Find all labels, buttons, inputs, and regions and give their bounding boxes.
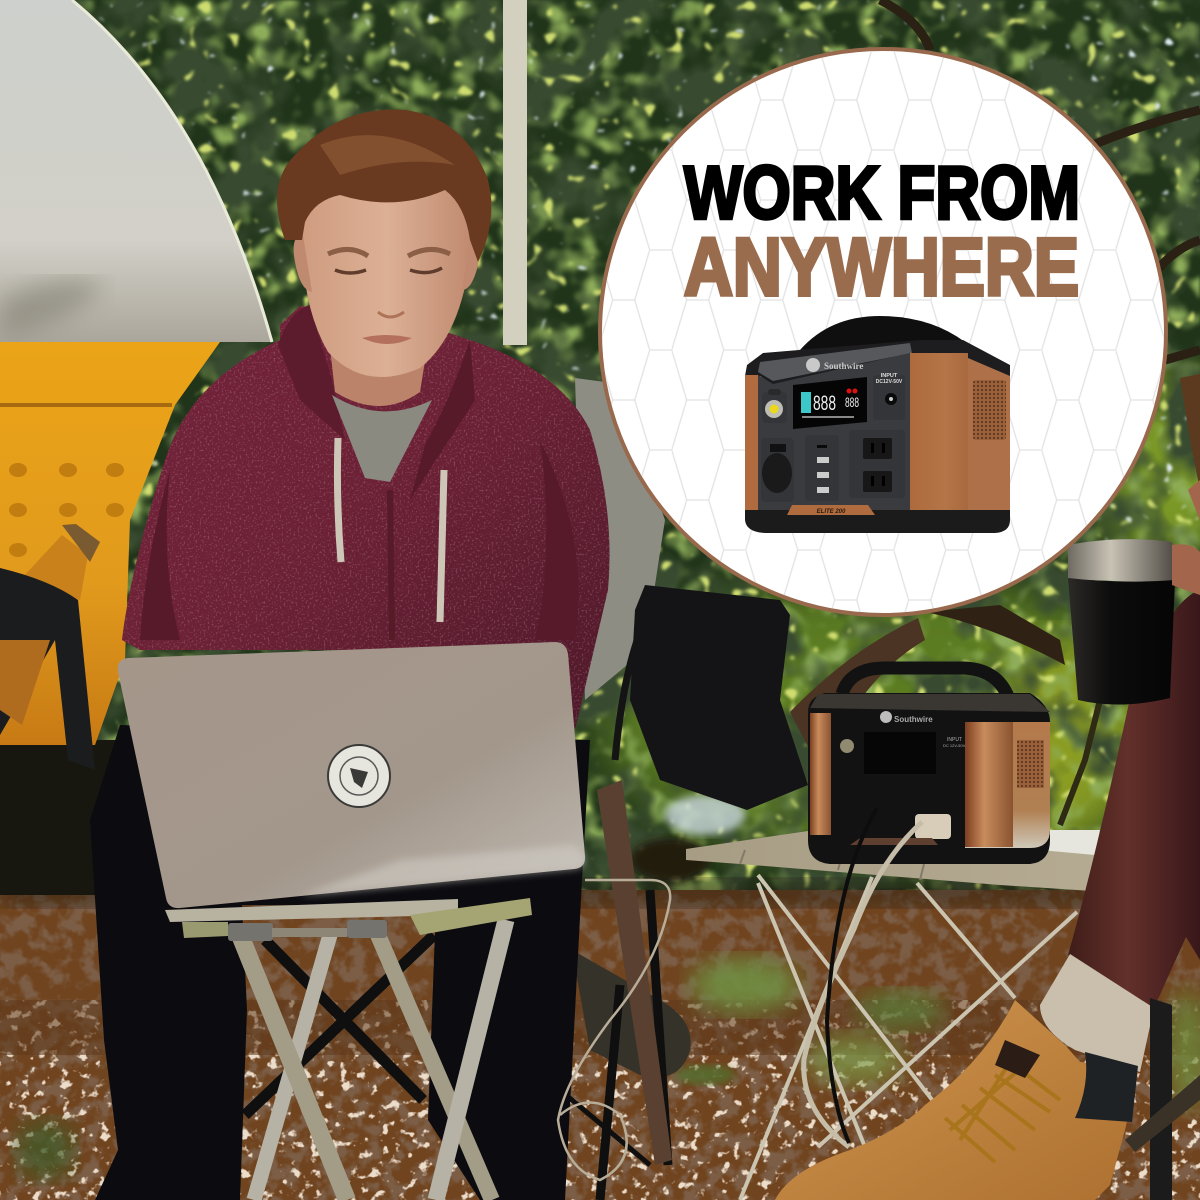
input port: DC12V-50V bbox=[876, 379, 903, 385]
input port: INPUT bbox=[881, 373, 898, 379]
portable power station on table bbox=[808, 668, 1050, 864]
vehicle: teardrop trailer bbox=[0, 0, 272, 895]
bottle and mesh pocket bbox=[0, 524, 100, 770]
drawstrings bbox=[337, 438, 444, 622]
LED lamp bbox=[762, 389, 787, 423]
grey control face bbox=[745, 353, 910, 512]
laptop bbox=[118, 642, 585, 908]
side table bbox=[686, 830, 1100, 1200]
logo: Southwire bbox=[824, 361, 863, 371]
base and model plate bbox=[745, 505, 1010, 533]
laptop sticker bbox=[328, 745, 390, 807]
product top band bbox=[758, 343, 912, 381]
hair bbox=[277, 110, 491, 262]
laptop stand bbox=[165, 898, 532, 1200]
product handle bbox=[800, 316, 965, 350]
water glimpse bbox=[665, 795, 745, 835]
trousers bbox=[90, 725, 590, 1200]
eyes, brows, mouth, nose bbox=[328, 249, 450, 256]
boot bbox=[775, 1000, 1138, 1200]
charging cables bbox=[804, 822, 922, 1147]
base and model plate: ELITE 200 bbox=[817, 509, 846, 515]
chair back and frame bbox=[245, 378, 691, 1200]
neck and face bbox=[328, 330, 430, 406]
LCD: 888 bbox=[813, 392, 836, 415]
heading: anywhere: ANYWHERE bbox=[684, 222, 1079, 313]
sock bbox=[1040, 954, 1154, 1072]
AC outlets bbox=[849, 430, 905, 498]
background: tree foliage bbox=[0, 0, 1200, 900]
pole bbox=[503, 0, 527, 345]
vent bbox=[973, 380, 1006, 440]
portable power station on table: INPUT bbox=[947, 737, 962, 743]
input port bbox=[873, 373, 905, 420]
logo bbox=[806, 358, 863, 372]
LCD bbox=[793, 377, 867, 429]
t-shirt collar bbox=[332, 395, 432, 482]
black bag on chair bbox=[630, 585, 808, 810]
LCD: 888 bbox=[845, 394, 859, 410]
chair pole and rod bbox=[1150, 998, 1172, 1200]
person: seated woman leg and boot bbox=[775, 590, 1200, 1200]
ground: wood-chip mulch bbox=[0, 880, 1200, 1200]
portable power station on table: Southwire bbox=[894, 715, 933, 724]
hexagon pattern bbox=[600, 49, 1166, 615]
copper sides bbox=[910, 353, 968, 512]
person: man working on laptop bbox=[90, 110, 610, 1200]
badge: white circle with headline and product bbox=[600, 49, 1166, 615]
DC socket bbox=[761, 438, 794, 502]
product outer shell bbox=[745, 340, 1010, 385]
USB ports bbox=[805, 435, 839, 501]
heading: work from: WORK FROM bbox=[684, 150, 1080, 234]
product: Southwire Elite 200 power station bbox=[745, 316, 1010, 533]
hoodie bbox=[122, 305, 610, 730]
portable power station on table: DC 12V-50V bbox=[943, 743, 966, 748]
travel mug and hand bbox=[1068, 374, 1200, 705]
